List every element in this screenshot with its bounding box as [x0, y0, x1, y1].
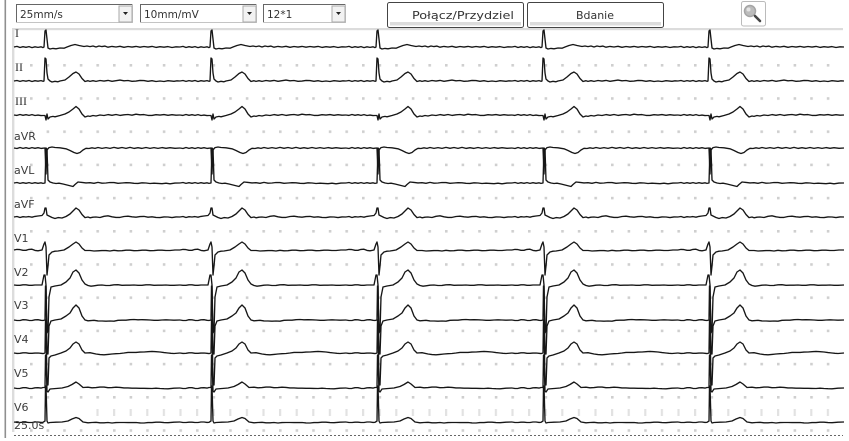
trace: V5: [14, 355, 844, 392]
button: study: Bdanie: [576, 10, 614, 22]
lead labels: V6: [14, 401, 29, 414]
lead labels: aVF: [14, 198, 35, 211]
speed dropdown: [16, 4, 132, 22]
trace: aVR: [14, 147, 844, 174]
lead labels: aVR: [14, 130, 36, 143]
speed dropdown: 25mm/s: [20, 9, 63, 21]
lead labels: aVL: [14, 164, 35, 177]
layout dropdown: [264, 4, 346, 22]
button: study: [528, 2, 664, 28]
gain dropdown: 10mm/mV: [144, 9, 200, 21]
lead labels: [14, 26, 44, 432]
toolbar: [16, 2, 766, 28]
left window border: [4, 0, 6, 438]
lead labels: V1: [14, 232, 29, 245]
trace: aVF: [14, 208, 844, 218]
trace: V1: [14, 242, 844, 275]
lead labels: V2: [14, 266, 29, 279]
trace: III: [14, 106, 844, 120]
trace: II: [14, 58, 844, 82]
lead labels: I: [15, 26, 19, 40]
lead labels: II: [15, 60, 23, 74]
trace: V4: [14, 320, 844, 385]
button: assign: Połącz/Przydziel: [412, 10, 514, 22]
layout dropdown: 12*1: [267, 9, 292, 21]
icon: magnifier: [742, 2, 766, 26]
trace: aVL: [14, 148, 844, 186]
trace: V6: [14, 386, 844, 423]
trace: V3: [14, 286, 844, 354]
lead labels: III: [15, 94, 27, 108]
lead labels: V3: [14, 299, 29, 312]
lead labels: V5: [14, 367, 29, 380]
grid dots: [30, 64, 830, 434]
trace: I: [14, 30, 844, 49]
trace: V2: [14, 270, 844, 333]
lead labels: V4: [14, 333, 29, 346]
gain dropdown: [140, 4, 256, 22]
lead labels: 25.0s: [14, 419, 44, 432]
button: assign: [388, 2, 524, 28]
